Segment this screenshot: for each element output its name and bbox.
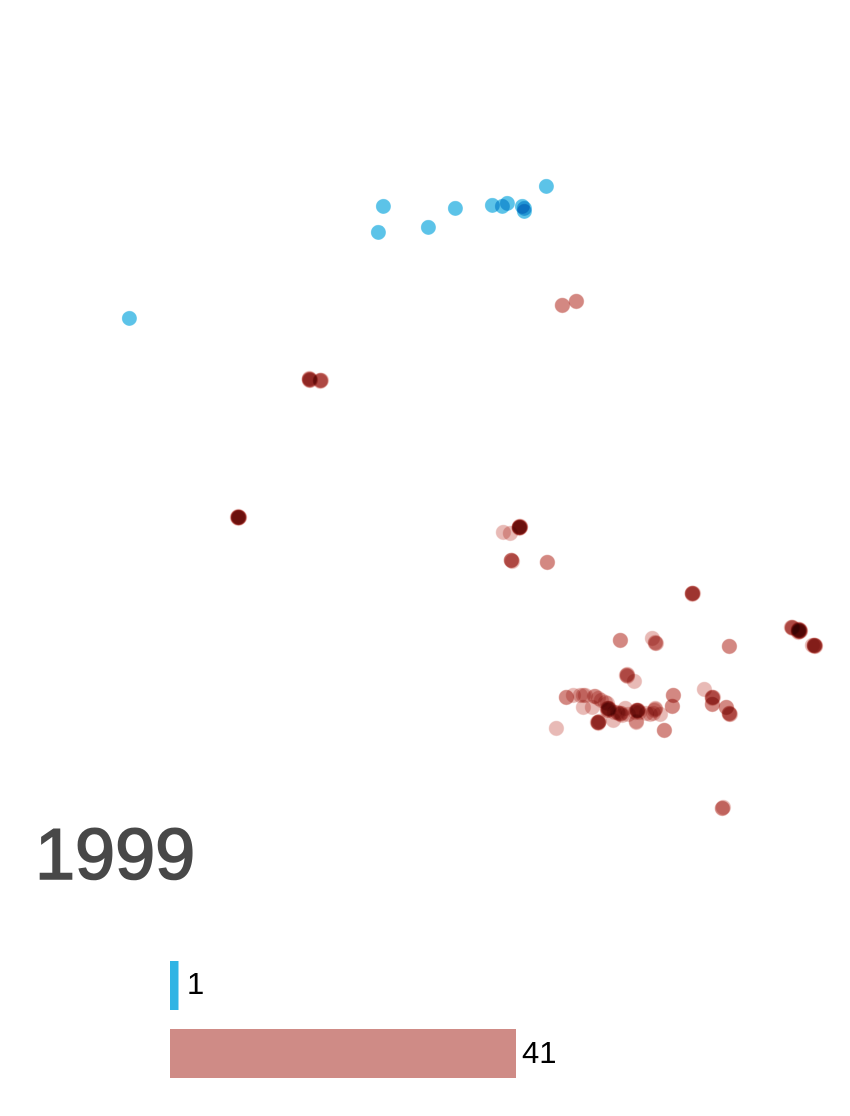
blue bar with value xyxy=(170,961,204,1010)
red dots: right group xyxy=(613,620,823,654)
red dots: middle group xyxy=(230,509,701,602)
red bar with value: 41 xyxy=(522,1035,556,1070)
year heading: 1999 xyxy=(35,815,195,895)
red dots: upper group xyxy=(302,294,584,389)
red dots: lower cluster xyxy=(549,667,738,816)
blue dots scatter xyxy=(122,179,554,326)
blue bar with value: 1 xyxy=(187,966,204,1001)
red bar with value xyxy=(170,1029,556,1078)
